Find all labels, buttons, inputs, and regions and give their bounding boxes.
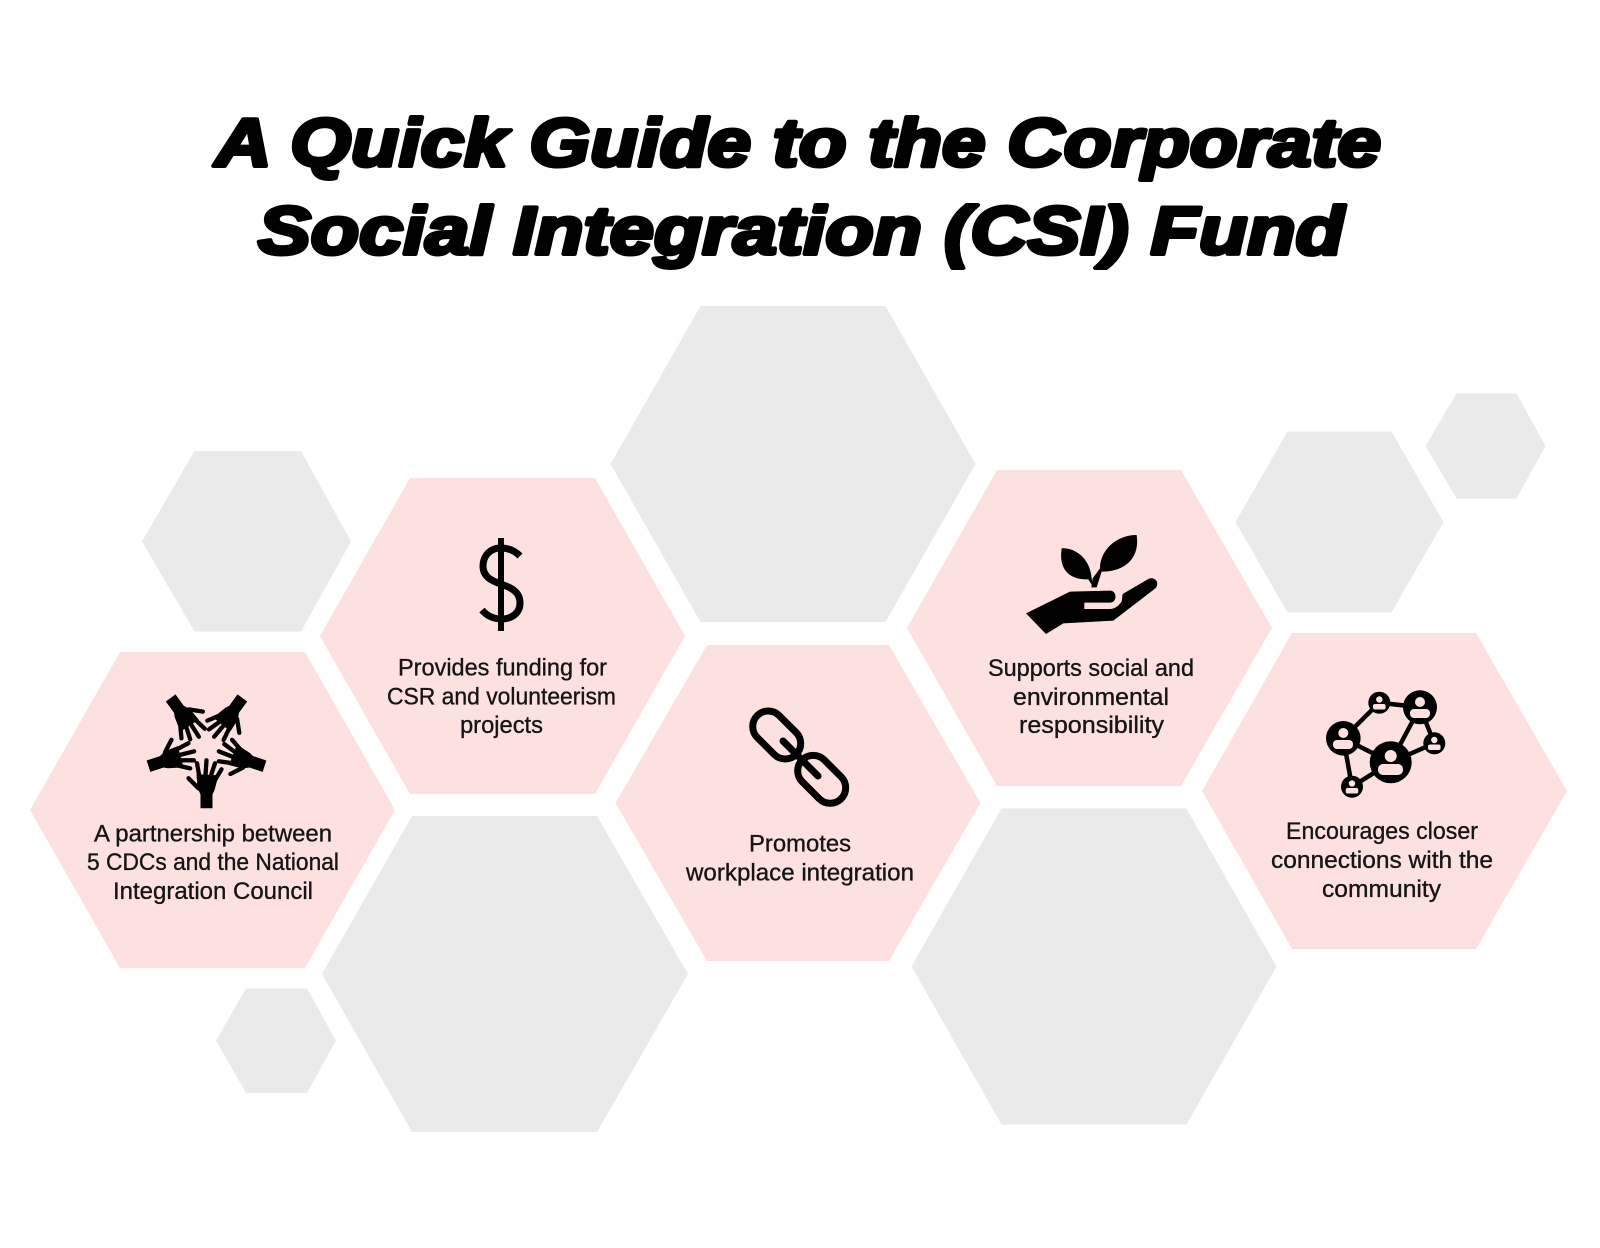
panel: funding [320,478,685,794]
text: workplace integration: workplace integration [685,860,914,886]
text: community connections: community [1322,876,1441,903]
text: workplace integration [685,830,914,886]
title [213,105,1381,269]
text: funding: CSR and volunteerism [387,684,616,710]
icon: dollar sign [482,538,520,631]
text: social responsibility: responsibility [1019,712,1164,739]
icon: five hands in a circle [143,687,269,808]
panel: social responsibility [907,470,1272,786]
grey hexagon: bottom left large [322,816,688,1132]
grey hexagon: top centre large [610,306,976,622]
text: social responsibility [988,655,1194,739]
text: partnership: 5 CDCs and the National [87,849,339,876]
grey hexagon: medium left [142,451,351,632]
text: funding [387,654,616,739]
text: partnership: A partnership between [94,820,332,848]
icon: people network [1326,690,1445,798]
icon: chain link [746,705,852,810]
grey hexagon: bottom right large [912,808,1276,1124]
title: A Quick Guide to the Corporate [213,105,1381,181]
panel: community connections [1202,633,1567,949]
text: workplace integration: Promotes [749,830,851,858]
text: partnership [87,820,339,905]
grey hexagon: small bottom left [216,988,336,1093]
text: funding: projects [460,712,543,739]
grey hexagon: small top right [1426,394,1546,498]
text: social responsibility: Supports social and [988,655,1194,682]
text: community connections [1271,818,1493,903]
text: community connections: Encourages closer [1286,818,1478,845]
title: Social Integration (CSI) Fund [258,193,1346,269]
text: funding: Provides funding for [398,654,607,682]
text: partnership: Integration Council [113,878,313,905]
panel: workplace integration [616,645,980,961]
panel: partnership [30,652,395,968]
grey hexagon: medium right [1236,432,1444,612]
text: community connections: connections with the [1271,847,1493,874]
text: social responsibility: environmental [1013,684,1169,711]
icon: hand holding plant [1026,535,1157,634]
